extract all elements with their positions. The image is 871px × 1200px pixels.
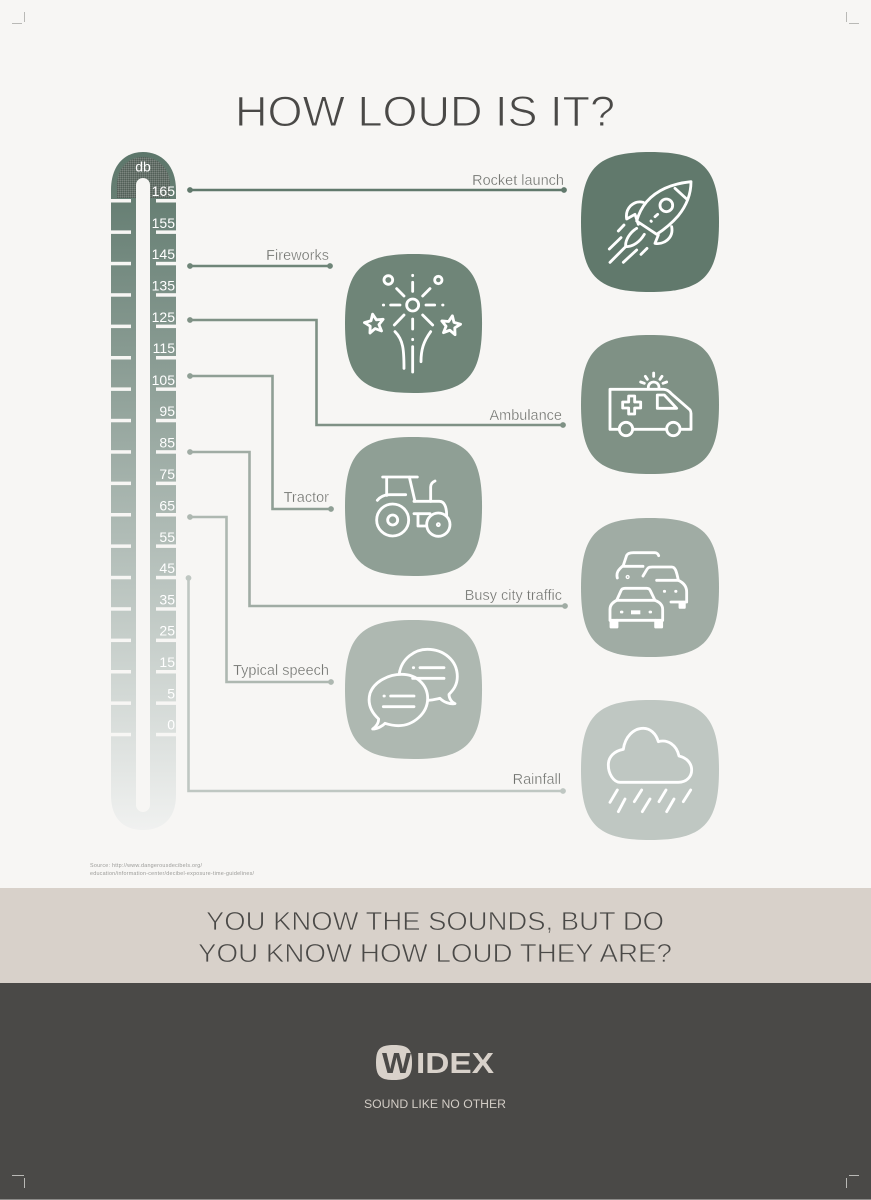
footer panel bbox=[0, 983, 871, 1200]
label: typical speech: Typical speech bbox=[233, 663, 329, 679]
tile: fireworks bbox=[345, 254, 482, 393]
tile: traffic bbox=[581, 518, 719, 657]
decibel labels: 125 bbox=[152, 309, 175, 325]
decibel labels: 145 bbox=[152, 246, 175, 262]
decibel labels: 5 bbox=[167, 686, 175, 702]
tile: rainfall bbox=[581, 700, 719, 840]
connector: tractor bbox=[188, 374, 333, 511]
decibel labels: 15 bbox=[159, 654, 175, 670]
icon: tractor bbox=[377, 477, 450, 536]
tile: ambulance bbox=[581, 335, 719, 474]
decibel labels: 105 bbox=[152, 372, 175, 388]
decibel labels: 65 bbox=[159, 498, 175, 514]
decibel labels: 135 bbox=[152, 278, 175, 294]
thermometer scale bbox=[111, 152, 176, 830]
thermometer body bbox=[111, 152, 176, 830]
logo: Widex: W bbox=[382, 1048, 412, 1080]
decibel labels: 155 bbox=[152, 215, 175, 231]
decibel labels bbox=[135, 158, 175, 732]
label: busy city traffic: Busy city traffic bbox=[465, 588, 562, 604]
tick marks bbox=[111, 199, 176, 736]
connector: typical speech bbox=[188, 515, 333, 684]
tagline band bbox=[0, 888, 871, 983]
label: ambulance: Ambulance bbox=[489, 408, 562, 424]
label: rainfall: Rainfall bbox=[513, 772, 561, 788]
crop marks bbox=[12, 12, 859, 24]
footer bottom edge bbox=[0, 1199, 871, 1200]
source note: Source: http://www.dangerousdecibels.org/ bbox=[90, 863, 202, 869]
source note bbox=[90, 863, 254, 877]
icon: traffic bbox=[610, 553, 687, 627]
footer crop marks bbox=[12, 1176, 859, 1188]
dithered top band bbox=[117, 157, 170, 198]
thermometer inner slot bbox=[136, 178, 150, 812]
decibel labels: db bbox=[135, 158, 151, 174]
decibel labels: 35 bbox=[159, 592, 175, 608]
label: rocket launch: Rocket launch bbox=[472, 173, 564, 189]
decibel labels: 95 bbox=[159, 403, 175, 419]
icon: speech bubbles bbox=[369, 649, 457, 729]
connector: ambulance bbox=[188, 318, 565, 427]
decibel labels: 55 bbox=[159, 529, 175, 545]
icon: rocket bbox=[609, 182, 691, 262]
tagline text: YOU KNOW THE SOUNDS, BUT DO bbox=[206, 906, 664, 936]
decibel labels: 45 bbox=[159, 560, 175, 576]
title: HOW LOUD IS IT? bbox=[235, 88, 615, 136]
connector: rocket launch bbox=[188, 188, 566, 192]
connector: busy city traffic bbox=[188, 450, 567, 608]
tagline text: YOU KNOW HOW LOUD THEY ARE? bbox=[198, 938, 672, 968]
decibel labels: 75 bbox=[159, 466, 175, 482]
decibel labels: 85 bbox=[159, 434, 175, 450]
icon: rain cloud bbox=[608, 728, 692, 812]
label: tractor: Tractor bbox=[284, 490, 329, 506]
logo: Widex bbox=[376, 1045, 495, 1080]
source note: education/information-center/decibel-exposure-time-guidelines/ bbox=[90, 871, 254, 877]
tile: tractor bbox=[345, 437, 482, 576]
decibel labels: 0 bbox=[167, 716, 175, 732]
tagline text bbox=[198, 906, 672, 968]
logo: Widex: IDEX bbox=[416, 1048, 495, 1080]
icon: ambulance bbox=[610, 373, 691, 436]
icon: fireworks bbox=[363, 275, 462, 372]
label: fireworks: Fireworks bbox=[266, 248, 329, 264]
tile: speech bbox=[345, 620, 482, 759]
connector: fireworks bbox=[188, 264, 332, 268]
tile: rocket bbox=[581, 152, 719, 292]
decibel labels: 115 bbox=[153, 340, 175, 356]
decibel labels: 165 bbox=[152, 183, 175, 199]
decibel labels: 25 bbox=[159, 622, 175, 638]
connector: rainfall bbox=[187, 576, 565, 793]
slogan: SOUND LIKE NO OTHER bbox=[364, 1099, 506, 1111]
